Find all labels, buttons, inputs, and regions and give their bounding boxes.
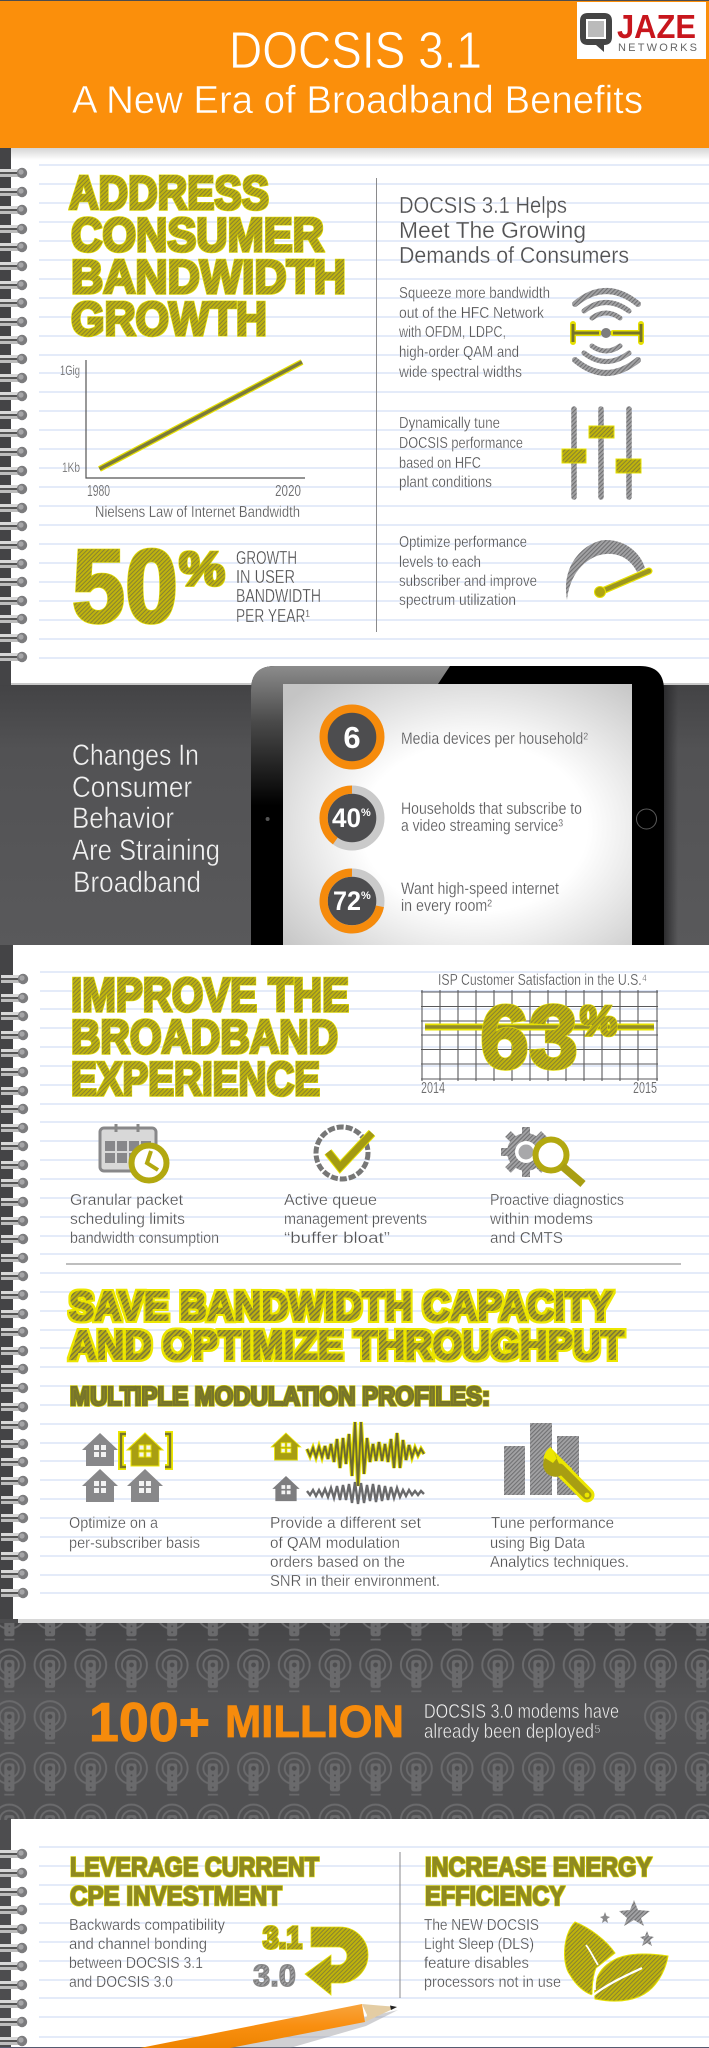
stat: 6 media devices: 6 [343,720,361,755]
chart: isp customer satisfaction: 2015 [633,1080,657,1097]
text: backwards compatibility: between DOCSIS 3.1 [69,1955,203,1972]
chart: isp customer satisfaction: ISP Customer Satisfaction in the U.S.⁴ [438,972,647,989]
text: optimize performance [399,534,537,609]
stat: 100+ million [89,1691,404,1753]
panel: notebook leverage and energy [0,1819,709,2048]
text: optimize per-subscriber [69,1515,200,1552]
icon: version arrow [253,1920,368,1995]
text: tune performance: using Big Data [490,1535,585,1552]
text: squeeze more bandwidth: Squeeze more bandwidth [399,285,550,302]
text: optimize performance: spectrum utilization [399,592,516,609]
text: squeeze more bandwidth [398,285,550,381]
text: provide a different set [270,1515,440,1590]
panel: changes in consumer behavior [0,666,709,945]
heading: changes in consumer behavior: Are Straining [72,834,220,867]
stat: 72 percent high-speed internet: 72 [333,886,361,916]
text: optimize per-subscriber: Optimize on a [69,1515,158,1532]
heading: helps meet demands: Demands of Consumers [399,242,629,268]
chart: isp customer satisfaction: 2014 [421,1080,445,1097]
heading: improve the broadband experience: BROADBAND [71,1010,338,1063]
stat: 40 percent video streaming: Households that subscribe to [401,799,582,818]
text: active queue [284,1192,427,1247]
text: squeeze more bandwidth: high-order QAM and [399,344,519,361]
stat: 72 percent high-speed internet [324,873,559,929]
text: tune performance: Tune performance [491,1515,614,1532]
heading: changes in consumer behavior: Changes In [72,739,199,772]
icon: wifi signal [573,291,641,373]
text: proactive diagnostics [489,1192,624,1247]
text: dynamically tune: based on HFC [399,455,481,472]
text: dynamically tune: DOCSIS performance [399,435,523,452]
logo: jaze networks [577,2,706,59]
icon: calendar clock [100,1124,166,1180]
chart: isp customer satisfaction: % [580,997,617,1044]
text: granular packet: scheduling limits [70,1211,185,1228]
stat: 40 percent video streaming: a video streaming service³ [401,816,563,835]
text: tune performance [490,1515,629,1571]
text: dynamically tune [399,415,523,491]
chart: isp customer satisfaction: 63 [480,988,578,1088]
icon: signal waveforms [271,1422,424,1504]
heading: changes in consumer behavior: Behavior [72,802,174,835]
stat: 6 media devices [324,709,588,765]
text: dynamically tune: Dynamically tune [399,415,500,432]
text: optimize performance: levels to each [399,554,481,571]
heading: improve the broadband experience: IMPROVE THE [71,968,349,1021]
text: backwards compatibility: Backwards compatibility [69,1917,225,1934]
icon: version arrow: 3.1 [263,1920,302,1955]
heading: increase energy efficiency [425,1852,652,1911]
icon: version arrow: 3.0 [253,1958,296,1993]
text: backwards compatibility: and channel bonding [69,1936,207,1953]
text: active queue: Active queue [284,1192,377,1209]
text: optimize performance: Optimize performance [399,534,527,551]
heading: address consumer bandwidth growth: BANDWIDTH [71,250,346,303]
stat: 100+ million: MILLION [225,1696,404,1747]
text: provide a different set: SNR in their environment. [270,1573,440,1590]
icon: speed gauge [566,540,649,600]
stat: 50 percent growth: PER YEAR¹ [236,606,310,626]
text: new docsis light sleep [424,1917,561,1991]
heading: changes in consumer behavior [72,739,220,899]
heading: leverage current cpe investment: LEVERAGE CURRENT [70,1852,319,1882]
stat: 72 percent high-speed internet: % [361,890,371,902]
chart: nielsens law line chart: Nielsens Law of Internet Bandwidth [95,504,300,521]
text: new docsis light sleep: processors not in use [424,1974,561,1991]
chart: nielsens law line chart: 1Gig [60,362,80,378]
icon: sliders [562,409,641,497]
spiral rings [0,168,27,662]
text: active queue: “buffer bloat” [284,1230,390,1247]
text: proactive diagnostics: within modems [489,1211,593,1228]
stat: 50 percent growth: IN USER [236,567,295,587]
subtitle: A New Era of Broadband Benefits [72,79,643,122]
stat: 100+ million: 100+ [89,1691,210,1753]
stat: 50 percent growth [72,529,321,645]
text: optimize per-subscriber: per-subscriber basis [69,1535,200,1552]
heading: increase energy efficiency: EFFICIENCY [425,1881,565,1911]
heading: helps meet demands: DOCSIS 3.1 Helps [399,192,567,218]
icon: gear magnifier [501,1127,583,1184]
text: modems deployed: already been deployed⁵ [424,1721,601,1743]
chart: nielsens law line chart: 1980 [87,483,110,500]
chart: isp customer satisfaction [421,972,658,1097]
text: optimize performance: subscriber and improve [399,573,537,590]
spiral rings [0,1849,27,2046]
heading: helps meet demands [399,192,629,268]
heading: address consumer bandwidth growth: ADDRESS [69,166,269,219]
text: provide a different set: of QAM modulation [270,1535,400,1552]
heading: save bandwidth capacity [69,1283,624,1368]
icon: check circle [316,1127,372,1179]
logo: jaze networks: JAZE [617,8,696,45]
heading: save bandwidth capacity: AND OPTIMIZE THROUGHPUT [69,1322,624,1368]
heading: improve the broadband experience: EXPERIENCE [71,1052,320,1105]
heading: address consumer bandwidth growth: CONSUMER [71,208,324,261]
icon: leaves and stars [565,1900,668,2001]
text: proactive diagnostics: and CMTS [490,1230,563,1247]
stat: 50 percent growth: GROWTH [236,548,297,568]
panel: notebook address consumer bandwidth growth [0,148,709,685]
text: new docsis light sleep: Light Sleep (DLS) [424,1936,534,1953]
chart: nielsens law line chart [60,360,305,521]
stat: 40 percent video streaming [324,790,582,846]
chart: nielsens law line chart: 2020 [275,483,301,500]
heading: helps meet demands: Meet The Growing [399,217,586,243]
heading: address consumer bandwidth growth [69,166,346,345]
logo: jaze networks: NETWORKS [618,42,697,54]
heading: increase energy efficiency: INCREASE ENERGY [425,1852,652,1882]
panel: 100+ million modems [0,1623,709,1820]
icon: houses [82,1433,170,1502]
panel: notebook improve experience and save bandwidth [0,945,709,1623]
text: granular packet: Granular packet [70,1192,184,1209]
title: DOCSIS 3.1 [229,22,482,80]
text: modems deployed [424,1701,619,1743]
heading: changes in consumer behavior: Consumer [72,771,192,804]
text: proactive diagnostics: Proactive diagnostics [490,1192,624,1209]
tablet [251,666,664,945]
text: backwards compatibility [69,1917,225,1991]
stat: 50 percent growth: BANDWIDTH [236,586,321,606]
stat: 50 percent growth: % [179,542,225,595]
text: active queue: management prevents [284,1211,427,1228]
text: squeeze more bandwidth: wide spectral widths [398,364,522,381]
text: new docsis light sleep: The NEW DOCSIS [424,1917,539,1934]
heading: leverage current cpe investment: CPE INVESTMENT [70,1881,282,1911]
text: squeeze more bandwidth: out of the HFC Network [399,305,545,322]
subheading: multiple modulation profiles: MULTIPLE MODULATION PROFILES: [70,1381,490,1411]
stat: 6 media devices: Media devices per household² [401,729,588,748]
text: provide a different set: orders based on the [270,1554,405,1571]
heading: changes in consumer behavior: Broadband [73,866,201,899]
text: dynamically tune: plant conditions [399,474,492,491]
stat: 40 percent video streaming: 40 [332,803,361,833]
text: granular packet [70,1192,219,1247]
heading: address consumer bandwidth growth: GROWTH [71,292,267,345]
icon: pencil [140,2004,398,2048]
text: tune performance: Analytics techniques. [490,1554,629,1571]
stat: 72 percent high-speed internet: Want high-speed internet [401,879,559,898]
chart: nielsens law line chart: 1Kb [62,459,80,475]
stat: 72 percent high-speed internet: in every room² [401,896,492,915]
text: provide a different set: Provide a different set [270,1515,422,1532]
spiral rings [1,974,28,1598]
stat: 50 percent growth: 50 [72,529,178,645]
heading: leverage current cpe investment [70,1852,319,1911]
text: new docsis light sleep: feature disables [424,1955,529,1972]
heading: improve the broadband experience [71,968,349,1105]
text: squeeze more bandwidth: with OFDM, LDPC, [398,324,506,341]
icon: bar chart wrench [504,1423,589,1497]
text: backwards compatibility: and DOCSIS 3.0 [69,1974,173,1991]
text: granular packet: bandwidth consumption [70,1230,219,1247]
panel: header banner [0,1,709,148]
text: modems deployed: DOCSIS 3.0 modems have [424,1701,619,1723]
heading: save bandwidth capacity: SAVE BANDWIDTH CAPACITY [69,1283,613,1329]
stat: 40 percent video streaming: % [361,807,371,819]
